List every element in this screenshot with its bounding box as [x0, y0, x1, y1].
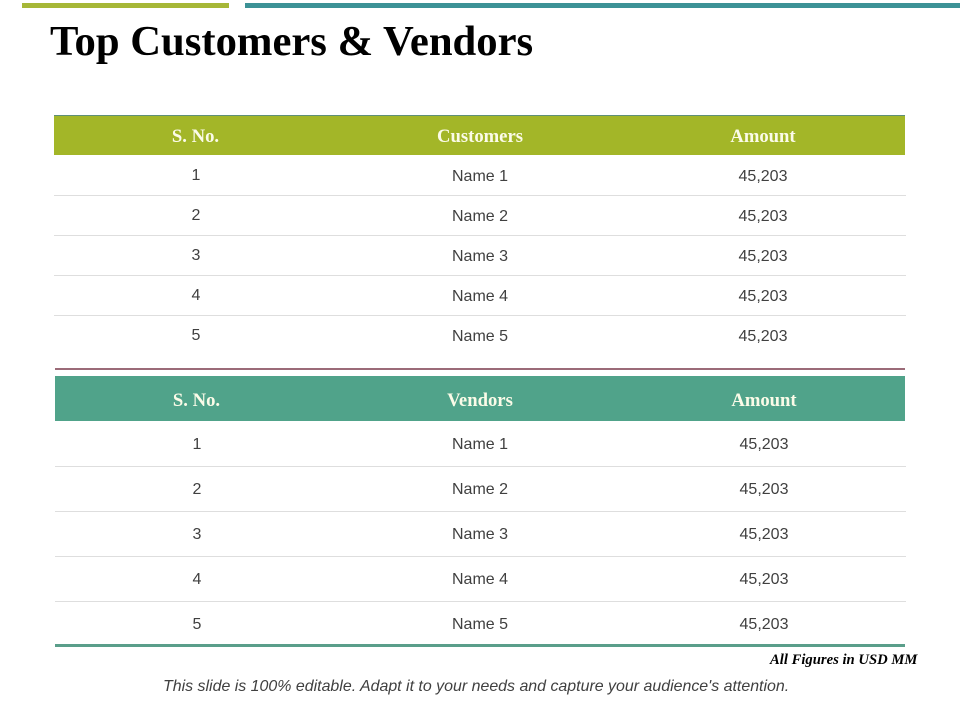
- name 5: Name 5: [452, 328, 508, 345]
- top accent bar: teal: [245, 3, 960, 8]
- vendors row 2: [193, 481, 788, 498]
- name 1: Name 1: [452, 168, 508, 185]
- name 2: Name 2: [452, 481, 508, 498]
- vendors row 1: [193, 436, 788, 453]
- vendors row 5: [193, 616, 788, 633]
- top accent bar: green: [22, 3, 229, 8]
- amount 1: 45,203: [740, 436, 788, 453]
- serial 2: 2: [193, 481, 201, 498]
- title: Top Customers & Vendors: [50, 18, 533, 65]
- panel: vendors table: [55, 376, 906, 647]
- amount 5: 45,203: [739, 328, 787, 345]
- amount 5: 45,203: [740, 616, 788, 633]
- name 2: Name 2: [452, 208, 508, 225]
- customers row 1: [192, 167, 787, 185]
- customers header row: [54, 115, 905, 155]
- serial 4: 4: [193, 571, 201, 588]
- serial 3: 3: [193, 526, 201, 543]
- vendors header row: [55, 376, 905, 421]
- name 4: Name 4: [452, 571, 508, 588]
- header: Amount: Amount: [731, 390, 797, 411]
- name 3: Name 3: [452, 526, 508, 543]
- header: Amount: Amount: [730, 126, 796, 147]
- customers row 4: [192, 287, 787, 305]
- vendors row 4: [192, 571, 788, 588]
- amount 3: 45,203: [739, 248, 787, 265]
- amount 2: 45,203: [739, 208, 787, 225]
- amount 4: 45,203: [740, 571, 788, 588]
- vendors row 3: [193, 526, 788, 543]
- name 3: Name 3: [452, 248, 508, 265]
- customers row 3: [192, 247, 787, 265]
- footer caption: This slide is 100% editable. Adapt it to your needs and capture your audience's attention.: [163, 678, 789, 695]
- serial 4: 4: [192, 287, 200, 304]
- header: S. No.: S. No.: [172, 126, 219, 147]
- serial 1: 1: [193, 436, 201, 453]
- customers row 5: [192, 327, 787, 345]
- serial 2: 2: [192, 207, 200, 224]
- vendors table bottom border: [55, 644, 905, 647]
- name 1: Name 1: [452, 436, 508, 453]
- name 4: Name 4: [452, 288, 508, 305]
- serial 5: 5: [192, 327, 200, 344]
- panel: customers table: [54, 115, 906, 370]
- customers table bottom border: [55, 368, 905, 370]
- amount 4: 45,203: [739, 288, 787, 305]
- name 5: Name 5: [452, 616, 508, 633]
- amount 2: 45,203: [740, 481, 788, 498]
- amount 3: 45,203: [740, 526, 788, 543]
- customers row 2: [192, 207, 787, 225]
- units note: All Figures in USD MM: [770, 652, 917, 668]
- header: Vendors: Vendors: [447, 390, 513, 411]
- serial 1: 1: [192, 167, 200, 184]
- header: Customers: Customers: [437, 126, 523, 147]
- serial 3: 3: [192, 247, 200, 264]
- header: S. No.: S. No.: [173, 390, 220, 411]
- amount 1: 45,203: [739, 168, 787, 185]
- serial 5: 5: [193, 616, 201, 633]
